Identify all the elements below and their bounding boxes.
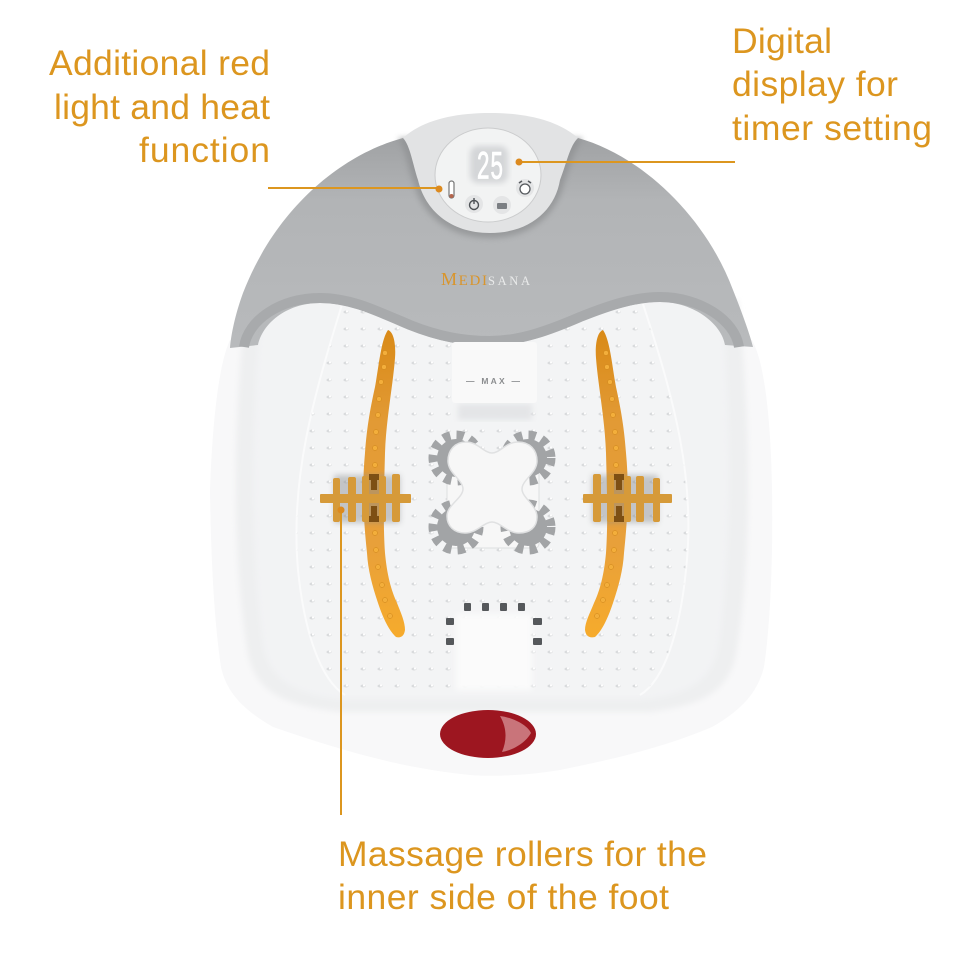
red light xyxy=(440,710,536,758)
roller shadows xyxy=(334,475,658,523)
left roller xyxy=(320,474,411,522)
label: red light and heat: Additional red xyxy=(49,43,270,83)
control panel xyxy=(435,128,541,222)
bowl body xyxy=(210,340,772,776)
label: massage rollers xyxy=(338,834,707,917)
right roller xyxy=(583,474,672,522)
right orange massage strip xyxy=(585,330,628,637)
control panel shadow xyxy=(398,138,583,238)
basin floor with massage dots xyxy=(296,310,688,688)
floor edge highlights xyxy=(296,295,688,695)
foot spa product xyxy=(210,113,772,776)
central massage gears xyxy=(434,436,550,549)
icon: alarm clock xyxy=(516,179,534,197)
callout line: red light xyxy=(268,186,442,192)
control panel surround xyxy=(403,113,578,233)
central white cross xyxy=(447,442,537,533)
left orange massage strip xyxy=(363,330,405,637)
label: red light and heat: function xyxy=(139,130,270,170)
callout line: rollers xyxy=(338,506,344,815)
icon: thermometer xyxy=(449,181,454,198)
label: massage rollers: Massage rollers for the xyxy=(338,834,707,874)
label: digital display: timer setting xyxy=(732,108,932,148)
logo: MEDI xyxy=(441,269,487,289)
logo: SANA xyxy=(488,274,530,288)
label: digital display: Digital xyxy=(732,21,832,61)
inner basin xyxy=(236,300,748,712)
grey top cover xyxy=(230,138,753,348)
label: red light and heat xyxy=(49,43,270,170)
cover lip xyxy=(244,297,739,347)
logo xyxy=(441,269,530,289)
water jets xyxy=(446,603,542,690)
label: massage rollers: inner side of the foot xyxy=(338,877,669,917)
label: digital display: display for xyxy=(732,64,898,104)
label: red light and heat: light and heat xyxy=(54,87,270,127)
icon: water xyxy=(493,196,511,214)
label: digital display xyxy=(732,21,932,148)
icon: power xyxy=(465,195,483,213)
digital display: 25 xyxy=(476,145,503,191)
max water mark xyxy=(452,342,537,420)
callout line: display xyxy=(516,158,735,166)
strip studs xyxy=(372,350,618,618)
max water mark: — MAX — xyxy=(466,376,520,386)
